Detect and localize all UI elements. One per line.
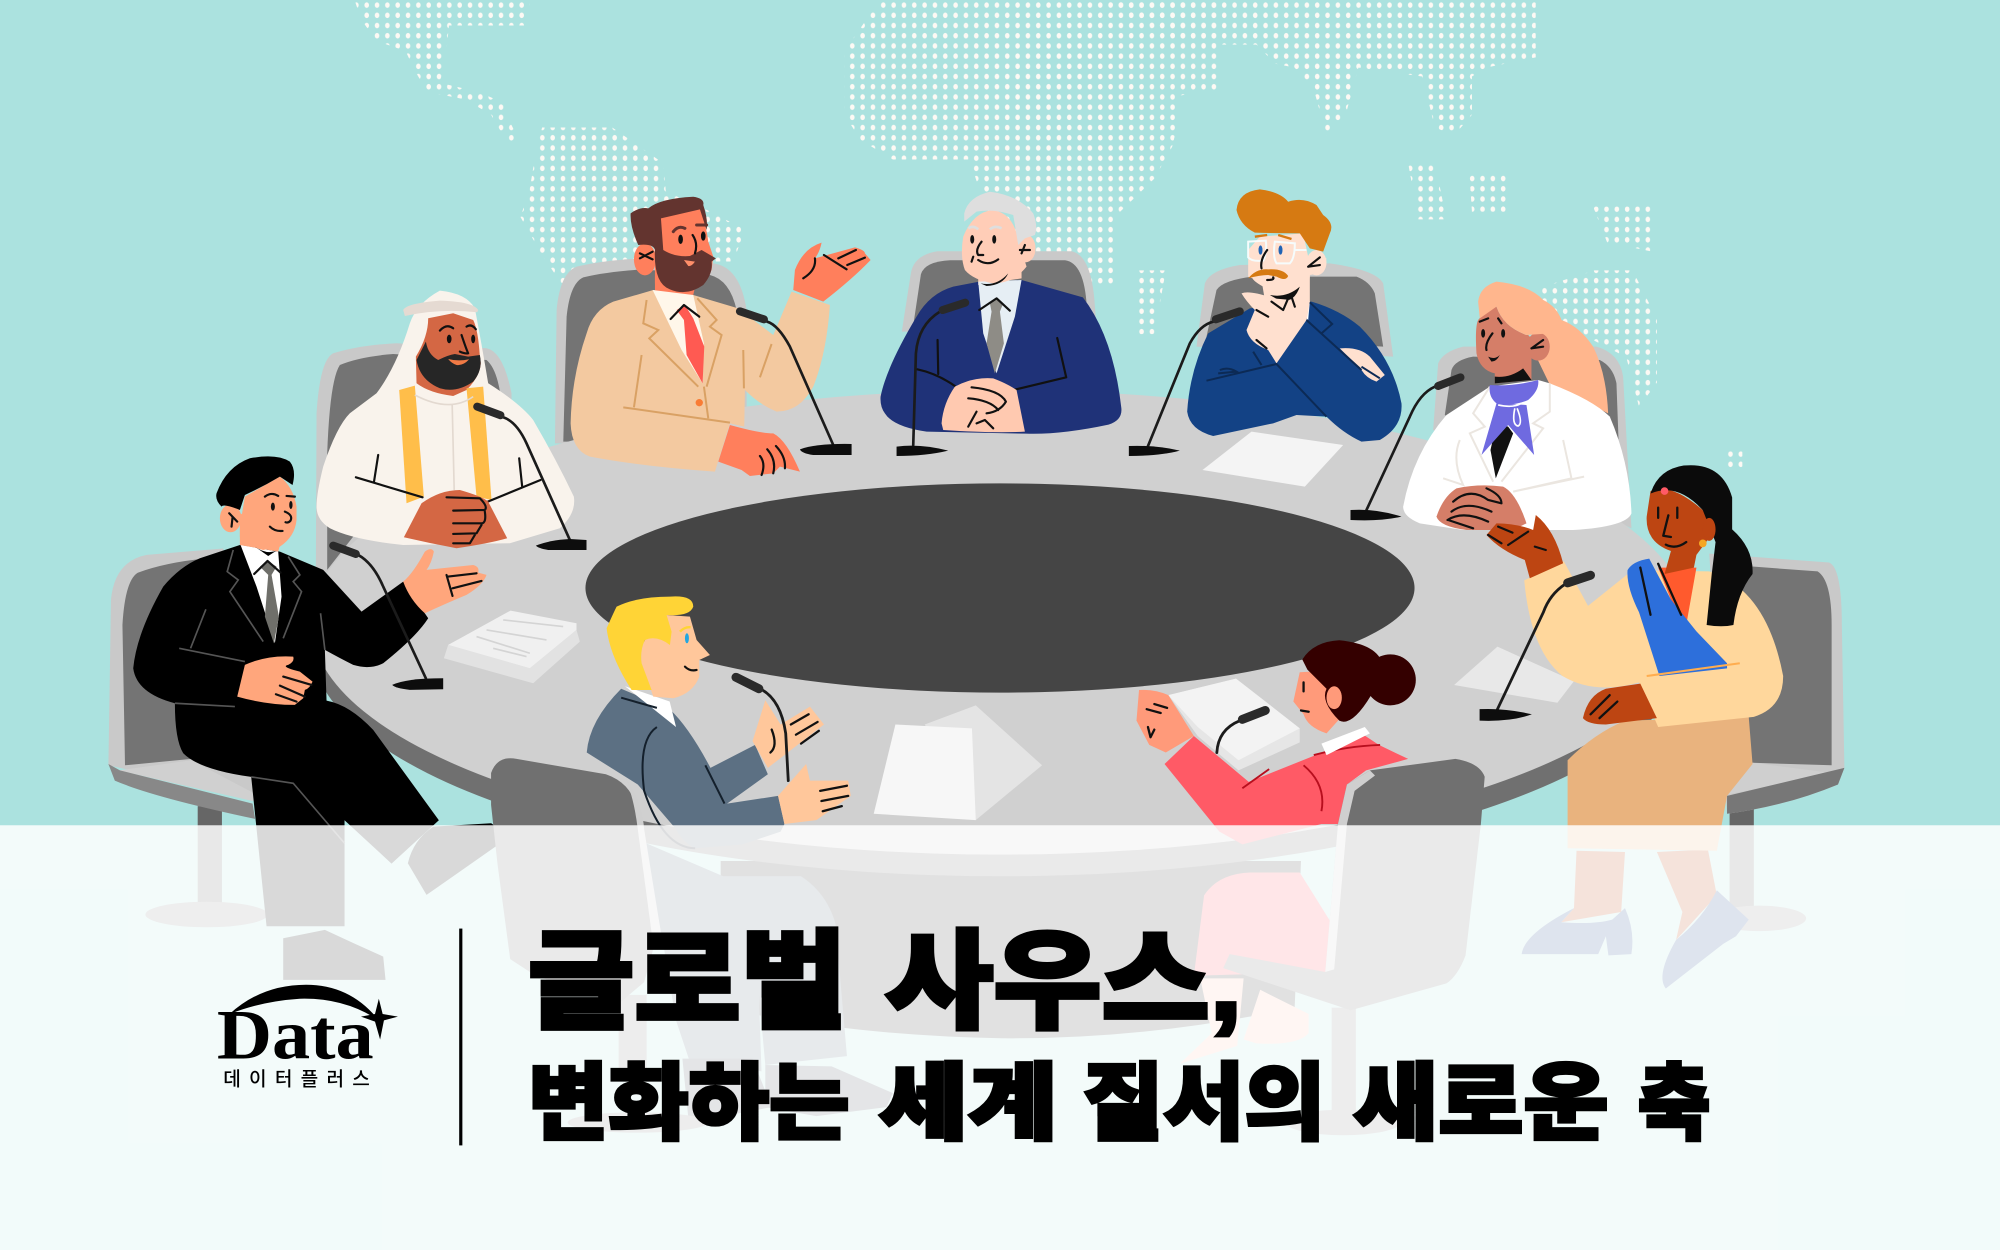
legs and shoes <box>1180 978 1309 1064</box>
person: man in traditional white robe <box>317 291 587 550</box>
microphone <box>1217 710 1265 753</box>
title line one: 글로벌 <box>528 922 847 1042</box>
person: man in black suit <box>133 456 510 980</box>
microphone <box>333 546 443 690</box>
chair: orange hair man <box>1197 263 1393 357</box>
microphone <box>736 677 788 781</box>
title line two: 새로운 <box>1353 1057 1608 1151</box>
vertical divider <box>459 929 462 1145</box>
person: woman in cream jacket and blue sash <box>1480 465 1844 989</box>
chair: beige man <box>555 258 747 443</box>
lower shoe <box>283 930 386 980</box>
shoes <box>1522 908 1632 955</box>
head <box>607 596 710 698</box>
title line two: 변화하는 <box>528 1057 849 1151</box>
documents on the table <box>444 432 1574 820</box>
logo: Data Plus <box>217 985 398 1090</box>
document: left stack <box>444 611 580 683</box>
document: right rear <box>1203 432 1343 487</box>
shoes <box>682 1059 893 1122</box>
skirt <box>1194 872 1332 976</box>
round table <box>311 390 1689 1038</box>
microphone <box>477 407 587 550</box>
jacket <box>587 689 784 848</box>
person: woman in pink jacket, front <box>1136 640 1416 1064</box>
table centre <box>585 483 1415 693</box>
papers held <box>1168 679 1300 770</box>
chairs behind the table <box>316 251 1631 573</box>
chair: man in robe <box>316 343 512 573</box>
chair: elderly man <box>902 251 1097 332</box>
logo arc <box>230 985 379 1020</box>
title line two: 세계 <box>879 1057 1057 1151</box>
microphone <box>740 311 852 455</box>
microphone <box>1350 377 1460 520</box>
title line one <box>528 922 1242 1042</box>
raised hand <box>1486 515 1563 578</box>
logo wordmark: Data <box>217 996 374 1075</box>
person: man in beige suit <box>571 197 871 476</box>
chair: left <box>108 548 268 927</box>
person: man with orange hair and crossed arms <box>1129 189 1402 456</box>
trousers <box>643 842 847 1071</box>
chair: blonde woman <box>1433 347 1631 528</box>
microphone <box>1129 311 1240 456</box>
document: right front <box>1454 647 1574 703</box>
person: blonde woman in white jacket <box>1350 282 1631 530</box>
document: centre sheets <box>874 705 1042 820</box>
translucent bottom band <box>0 825 2000 1250</box>
raised shoe <box>408 823 510 895</box>
microphone <box>1480 575 1591 721</box>
microphone <box>897 303 965 456</box>
logo star <box>361 999 398 1040</box>
front right chair <box>1223 759 1485 1135</box>
title line two: 축 <box>1638 1057 1710 1151</box>
person: blond man in grey suit, front <box>568 596 893 1133</box>
dotted world map <box>355 0 1742 469</box>
title line two: 질서의 <box>1083 1057 1325 1151</box>
title line two <box>528 1057 1710 1151</box>
logo Korean name: 데이터플러스 <box>223 1068 370 1090</box>
chair: right <box>1709 554 1844 931</box>
person: elderly man in navy suit <box>880 192 1121 456</box>
front left chair <box>491 758 661 1071</box>
title line one: 사우스, <box>885 922 1242 1042</box>
legs <box>1561 851 1625 922</box>
